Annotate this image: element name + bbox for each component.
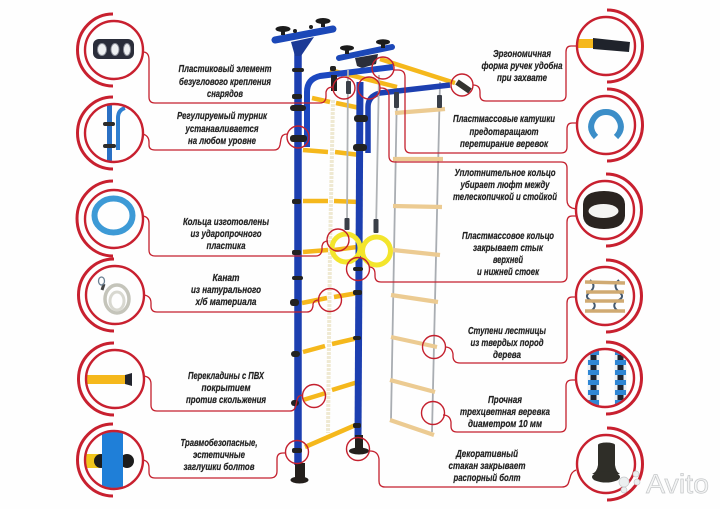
text: ladder steps: Ступени лестницы [468,325,546,337]
pole clamps [290,66,368,453]
text: spools [453,113,555,150]
text: plastic ring: Пластмассовое кольцо [462,230,554,242]
text: pull-up bar: Регулируемый турник [177,110,268,122]
text: sealing ring: Уплотнительное кольцо [454,167,556,179]
second bracket [355,54,378,68]
text: sealing ring [453,167,557,203]
left knobs [276,18,330,35]
text: spools: перетирание веревок [460,138,549,150]
text: tricolor rope [460,394,550,430]
text: handles: Эргономичная [493,48,551,60]
text: bolt caps: заглушки болтов [184,461,255,473]
wooden rope ladder ropes [391,82,440,432]
left ladder rungs [302,98,360,447]
icon: plastic spool [591,112,621,137]
circle frames: right column [576,10,642,500]
text: plastic ring [462,230,554,278]
text: decorative cup: распорный болт [453,472,520,484]
text: tricolor rope: диаметром 10 мм [468,418,542,430]
icon: cotton rope coil [98,277,129,313]
markers on the product [286,57,473,464]
climbing rope [328,100,333,433]
right foot [349,435,369,454]
text: pull-up bar: устанавливается [185,123,258,135]
left bracket [291,37,314,56]
icon: sealing ring [583,191,625,229]
text: sealing ring: убирает люфт между [460,179,550,191]
watermark: Avito [619,469,709,499]
icon: wooden ladder [585,280,625,311]
text: crossbars: покрытием [202,382,251,394]
icon: decorative cup [592,442,620,482]
product: wall sports complex [275,18,470,484]
text: sealing ring: телескопичкой и стойкой [453,191,557,203]
text: pull-up bar: на любом уровне [188,135,256,147]
text: bolt caps [180,437,258,473]
text: rings: из ударопрочного [190,228,262,240]
text: plastic element: снарядов [207,88,243,100]
icon: adjustable pull-up bar [103,105,126,161]
text: bolt caps: Травмобезопасные, [180,437,258,449]
text: decorative cup: Декоративный [455,448,518,460]
text: rings: пластика [206,240,246,252]
text: spools: Пластмассовые катушки [453,113,555,125]
right pole [358,82,360,438]
text: crossbars: против скольжения [186,394,266,406]
handle [457,82,470,91]
text: ladder steps [468,325,546,361]
icon: plastic mounting element [93,39,134,59]
text: decorative cup: стакан закрывает [448,460,526,472]
text: ladder steps: из твердых пород [470,337,544,349]
text: plastic element [178,63,272,100]
text: spools: предотвращают [470,126,538,138]
text: rope: х/б материала [195,296,257,308]
text: plastic element: Пластиковый элемент [178,63,272,75]
text: handles: форма ручек удобна [482,60,563,72]
leader lines [143,46,577,487]
text: crossbars [186,370,266,406]
blue curved tube one [307,67,393,147]
icon: three-colour rope [594,350,620,406]
text: plastic ring: закрывает стык [473,242,544,254]
text: rope: из натурального [191,284,261,296]
text: handles: при захвате [497,72,547,84]
text: tricolor rope: Прочная [488,394,522,406]
gym ring buckles [344,81,442,233]
text: rope [191,272,261,308]
blue curved tube two [368,85,450,153]
second knobs [340,39,390,54]
gym rings [332,234,390,265]
text: handles [482,48,563,84]
text: plastic ring: верхней [493,254,523,266]
text: pull-up bar [177,110,268,147]
icon: yellow crossbar [85,373,132,386]
left foot [290,463,308,484]
text: rings: Кольца изготовлены [183,216,269,228]
text: tricolor rope: трехцветная веревка [460,406,550,418]
text: rope: Канат [212,272,240,284]
gym ring ropes [347,70,379,232]
text: ladder steps: дерева [493,349,521,361]
left pole [294,52,302,465]
wooden rope ladder rungs [390,109,445,435]
text: bolt caps: эстетичные [193,449,245,461]
icon: handle grip [576,38,630,52]
text: plastic element: безуглового крепления [179,76,271,88]
circle frames: left column [77,14,144,496]
left top bar [275,29,333,40]
text: rings [183,216,269,252]
icon: bolt caps [86,432,134,488]
watermark: Avito: Avito [646,469,709,499]
icon: blue ring [94,198,132,232]
text: crossbars: Перекладины с ПВХ [188,370,265,382]
second top bar [339,47,392,58]
text: decorative cup [448,448,526,484]
yellow upper bars [330,59,455,87]
text: plastic ring: и нижней стоек [477,266,539,278]
